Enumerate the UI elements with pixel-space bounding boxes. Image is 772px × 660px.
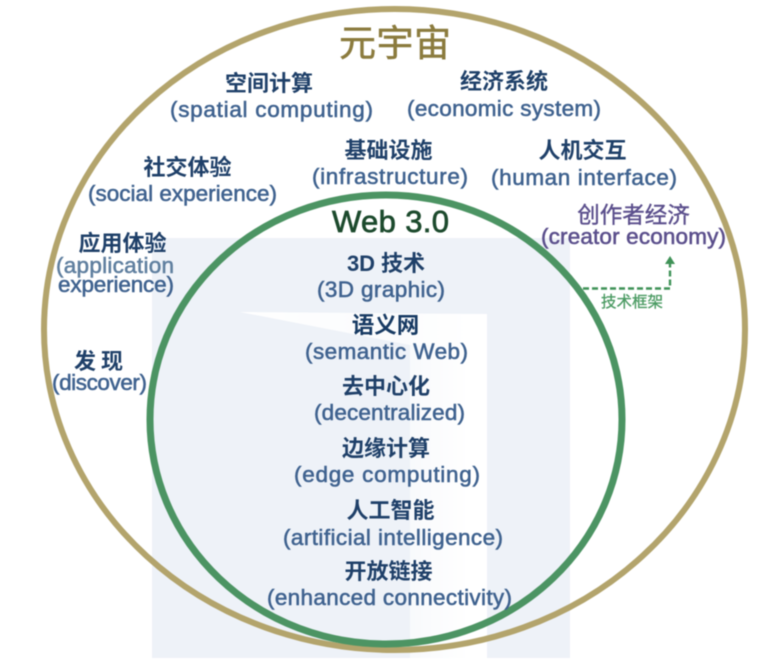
item: artificial intelligence bbox=[283, 498, 503, 550]
label: application experience: (application bbox=[56, 253, 174, 278]
title: metaverse: 元宇宙 bbox=[339, 23, 451, 64]
label: economic system bbox=[407, 69, 601, 121]
label: infrastructure: 基础设施 bbox=[344, 138, 433, 163]
item: decentralized bbox=[314, 374, 465, 425]
arrow: technical framework bbox=[583, 256, 675, 288]
background watermark shape bbox=[152, 238, 570, 658]
label: social experience: 社交体验 bbox=[143, 155, 232, 180]
label: discover bbox=[52, 349, 147, 395]
item: semantic web: (semantic Web) bbox=[305, 339, 468, 364]
label: spatial computing bbox=[170, 71, 373, 122]
item: decentralized: 去中心化 bbox=[342, 374, 430, 399]
label: human interface: 人机交互 bbox=[538, 138, 627, 163]
label: infrastructure: (infrastructure) bbox=[312, 164, 468, 189]
label: spatial computing: (spatial computing) bbox=[170, 97, 373, 122]
item: enhanced connectivity: (enhanced connectivity) bbox=[267, 585, 512, 610]
label: application experience: experience) bbox=[58, 272, 174, 297]
label: economic system: (economic system) bbox=[407, 96, 601, 121]
item: 3D graphic: (3D graphic) bbox=[317, 277, 445, 302]
item: decentralized: (decentralized) bbox=[314, 400, 465, 425]
item: enhanced connectivity: 开放链接 bbox=[344, 559, 433, 584]
arrow label: technical framework: 技术框架 bbox=[601, 293, 663, 311]
item: edge computing bbox=[294, 436, 480, 487]
item: artificial intelligence: (artificial intelligence) bbox=[283, 525, 503, 550]
label: human interface: (human interface) bbox=[491, 165, 677, 190]
label: infrastructure bbox=[312, 138, 468, 189]
label: economic system: 经济系统 bbox=[460, 69, 548, 94]
item: 3D graphic: 3D 技术 bbox=[347, 251, 425, 276]
item: semantic web bbox=[305, 313, 468, 364]
item: edge computing: 边缘计算 bbox=[342, 436, 430, 461]
item: artificial intelligence: 人工智能 bbox=[346, 498, 435, 523]
label: application experience bbox=[56, 231, 174, 297]
label: creator economy: (creator economy) bbox=[541, 224, 726, 249]
label: human interface bbox=[491, 138, 677, 190]
heading: Web 3.0: Web 3.0 bbox=[332, 204, 449, 239]
label: application experience: 应用体验 bbox=[78, 231, 167, 256]
label: creator economy bbox=[541, 203, 726, 249]
item: edge computing: (edge computing) bbox=[294, 462, 480, 487]
label: creator economy: 创作者经济 bbox=[577, 203, 690, 228]
label: discover: (discover) bbox=[52, 370, 147, 395]
item: semantic web: 语义网 bbox=[352, 313, 419, 338]
label: social experience bbox=[88, 155, 277, 206]
label: discover: 发 现 bbox=[74, 349, 123, 374]
item: enhanced connectivity bbox=[267, 559, 512, 610]
label: social experience: (social experience) bbox=[88, 181, 277, 206]
item: 3D graphic bbox=[317, 251, 445, 302]
inner circle: Web 3.0 bbox=[150, 195, 622, 644]
label: spatial computing: 空间计算 bbox=[225, 71, 313, 96]
